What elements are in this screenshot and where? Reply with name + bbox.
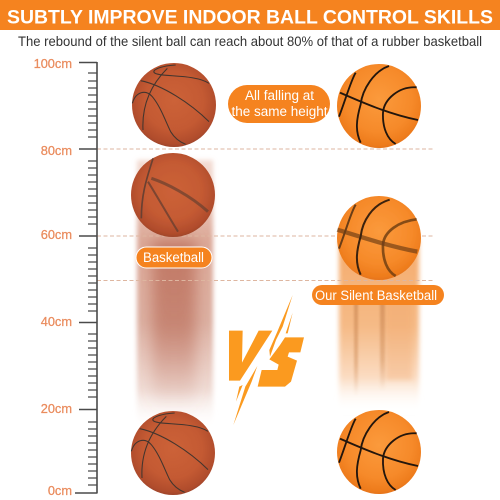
basketball bottom xyxy=(131,411,215,495)
motion trail: basketball xyxy=(137,160,213,430)
title: SUBTLY IMPROVE INDOOR BALL CONTROL SKILLS xyxy=(7,6,493,28)
motion trail: silent basketball xyxy=(339,240,419,412)
label: basketball: Basketball xyxy=(143,250,204,265)
callout: all falling at the same height xyxy=(228,85,330,123)
ruler labels: 40cm xyxy=(41,314,72,329)
dashed height guides xyxy=(97,149,435,280)
ruler labels: 20cm xyxy=(41,401,72,416)
ruler labels: 0cm xyxy=(48,483,72,498)
basketball top xyxy=(132,63,216,147)
callout: all falling at the same height: All falling at xyxy=(245,88,314,103)
label: our silent basketball: Our Silent Basketball xyxy=(315,288,437,303)
basketball rebound, blurred xyxy=(131,153,215,237)
subtitle: The rebound of the silent ball can reach about 80% of that of a rubber basketball xyxy=(18,34,482,49)
callout: all falling at the same height: the same height xyxy=(231,104,328,119)
silent ball top xyxy=(337,64,421,148)
VS emblem xyxy=(229,295,304,425)
silent ball bottom xyxy=(337,410,421,494)
ruler labels xyxy=(34,56,72,498)
ruler labels: 100cm xyxy=(34,56,72,71)
ruler xyxy=(75,62,97,494)
header banner xyxy=(0,0,500,30)
ruler labels: 60cm xyxy=(41,227,72,242)
ruler labels: 80cm xyxy=(41,143,72,158)
label: basketball xyxy=(136,247,212,268)
silent ball rebound, blurred xyxy=(337,196,421,280)
